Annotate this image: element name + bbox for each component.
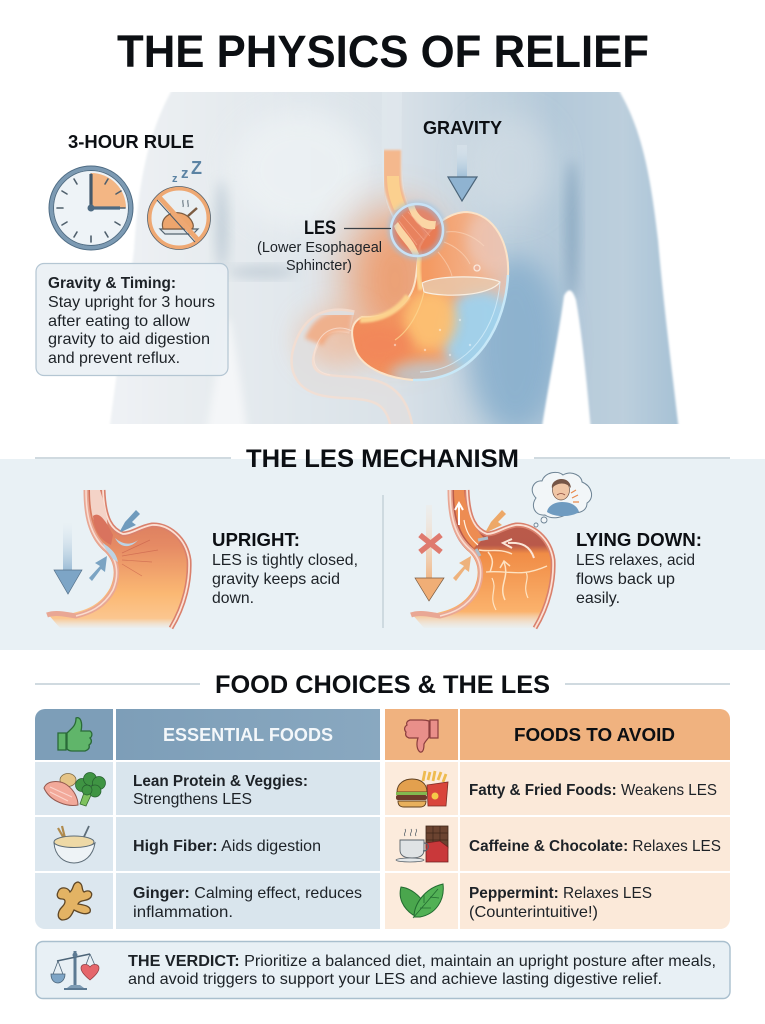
text: lying down: LYING DOWN: xyxy=(576,530,702,550)
icon: sleeping z's xyxy=(172,158,202,185)
heading: the LES mechanism: THE LES MECHANISM xyxy=(246,445,519,473)
icon: no food before bed xyxy=(148,186,210,250)
text: upright: gravity keeps acid xyxy=(212,571,340,588)
row: fatty and fried foods: Fatty & Fried Foods: Weakens LES xyxy=(469,782,717,799)
label: LES: Sphincter) xyxy=(286,257,352,274)
verdict text xyxy=(128,953,716,988)
icon: balance scale xyxy=(51,951,99,990)
callout: gravity and timing: gravity to aid digestion xyxy=(48,331,210,348)
panel: foods to avoid table xyxy=(385,709,730,929)
icon: clock xyxy=(49,166,133,250)
icon: sleeping z's: z xyxy=(172,173,178,185)
text: upright xyxy=(212,530,358,607)
diagram: lying down stomach xyxy=(411,490,553,628)
icon: thumbs down xyxy=(405,720,438,752)
callout: gravity and timing: Gravity & Timing: xyxy=(48,275,176,292)
row: ginger: Ginger: Calming effect, reduces xyxy=(133,885,362,902)
row: peppermint: Peppermint: Relaxes LES xyxy=(469,885,652,902)
icon: burger and fries xyxy=(396,771,448,807)
esophagus xyxy=(383,148,426,234)
text: lying down: easily. xyxy=(576,590,620,607)
callout: gravity and timing xyxy=(36,264,228,376)
title: THE PHYSICS OF RELIEF xyxy=(117,26,649,77)
LES sphincter highlight xyxy=(391,204,443,257)
callout: gravity and timing: and prevent reflux. xyxy=(48,350,180,367)
icon: oat bowl xyxy=(54,826,95,863)
label: LES: (Lower Esophageal xyxy=(257,239,382,256)
row: high fiber: High Fiber: Aids digestion xyxy=(133,838,321,855)
stomach xyxy=(351,211,510,382)
callout: gravity and timing: Stay upright for 3 hours xyxy=(48,294,215,311)
row: caffeine and chocolate: Caffeine & Chocolate: Relaxes LES xyxy=(469,838,721,855)
text: upright: LES is tightly closed, xyxy=(212,552,358,569)
icon: sleeping z's: z xyxy=(181,165,188,182)
text: upright: down. xyxy=(212,590,254,607)
label: 3-hour rule: 3-HOUR RULE xyxy=(68,132,194,152)
callout: gravity and timing: after eating to allow xyxy=(48,313,190,330)
diagram: upright stomach xyxy=(47,490,189,628)
orange glow behind stomach xyxy=(299,208,443,370)
icon: salmon and broccoli xyxy=(44,772,106,806)
row: lean protein and veggies: Lean Protein & Veggies: xyxy=(133,773,308,790)
header: foods to avoid: FOODS TO AVOID xyxy=(514,725,675,745)
duodenum xyxy=(302,320,402,430)
panel: the LES mechanism background xyxy=(0,459,765,650)
header: essential foods: ESSENTIAL FOODS xyxy=(163,725,333,745)
icon: thought bubble with heartburn person xyxy=(532,472,592,527)
icon: thumbs up xyxy=(58,718,92,751)
text: lying down: LES relaxes, acid xyxy=(576,552,695,569)
icon: coffee and chocolate xyxy=(396,826,448,862)
verdict text: THE VERDICT: Prioritize a balanced diet, maintain an upright posture after meals, xyxy=(128,953,716,970)
label: LES xyxy=(257,218,391,274)
row note: strengthens LES: Strengthens LES xyxy=(133,791,252,808)
panel: essential foods table xyxy=(35,709,380,929)
text: lying down xyxy=(576,530,702,607)
panel: the verdict xyxy=(36,942,730,998)
label: gravity: GRAVITY xyxy=(423,118,502,138)
row note: counterintuitive: (Counterintuitive!) xyxy=(469,904,598,921)
text: lying down: flows back up xyxy=(576,571,675,588)
icon: mint leaves xyxy=(400,884,443,918)
icon: sleeping z's: Z xyxy=(191,158,202,178)
text: upright: UPRIGHT: xyxy=(212,530,300,550)
body torso xyxy=(108,80,680,440)
arrow: gravity xyxy=(448,145,477,201)
icon: ginger root xyxy=(57,882,92,920)
heading: food choices: FOOD CHOICES & THE LES xyxy=(215,671,550,699)
label: LES: LES xyxy=(304,218,336,239)
row note: inflammation: inflammation. xyxy=(133,904,233,921)
panel: anatomy hero illustration xyxy=(108,80,680,440)
verdict text: and avoid triggers to support your LES and achieve lasting digestive relief. xyxy=(128,971,662,988)
